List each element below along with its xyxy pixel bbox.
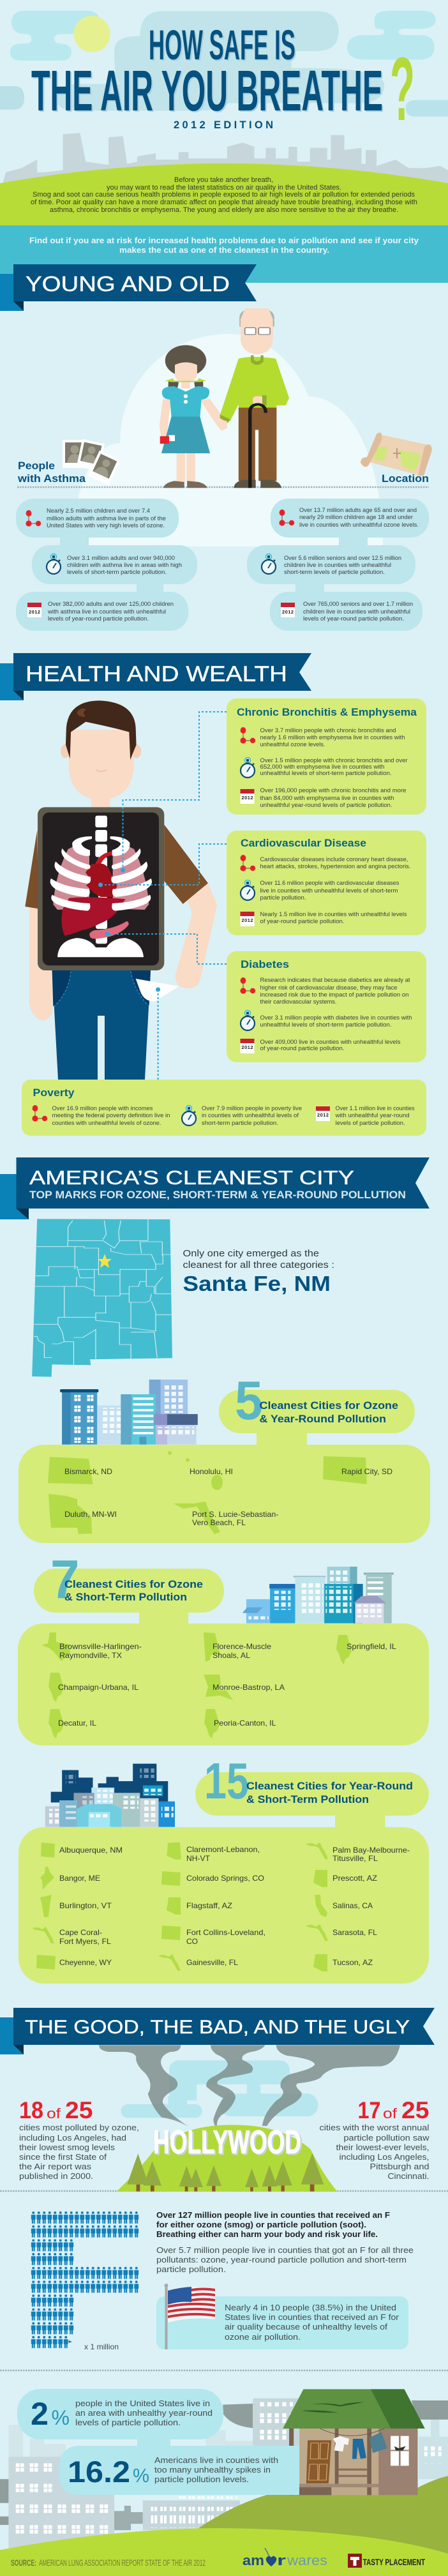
callout: 38.5 percent with flag: States live in counties that received an F for xyxy=(225,2312,399,2322)
stat: 17 of 25: cities with the worst annual xyxy=(319,2123,429,2132)
callout: 2 percent: people in the United States live in xyxy=(75,2399,210,2408)
heading: year-round and short-term xyxy=(246,1781,413,1805)
stat: 18 of 25: cities most polluted by ozone, xyxy=(19,2123,139,2132)
callout: 16.2 percent: too many unhealthy spikes in xyxy=(154,2465,271,2474)
callout: 2 percent: 2 xyxy=(31,2396,49,2432)
title: HOW SAFE IS xyxy=(150,22,297,70)
title: HOW SAFE IS xyxy=(149,21,295,68)
stat: 17 of 25: Pittsburgh and xyxy=(370,2162,429,2171)
panel: cardiovascular disease: Cardiovascular Disease xyxy=(241,837,366,849)
city names: Decatur, IL xyxy=(58,1719,97,1728)
icon: ozone molecule xyxy=(279,509,294,526)
panel: chronic bronchitis and emphysema: Chronic Bronchitis & Emphysema xyxy=(237,706,417,718)
header clouds and sun xyxy=(0,11,448,117)
section banner: america's cleanest city: TOP MARKS FOR OZONE, SHORT-TERM & YEAR-ROUND POLLUTION xyxy=(29,1189,406,1201)
panel: people with asthma stats: United States with very high levels of ozone. xyxy=(47,522,165,529)
panel: chronic bronchitis and emphysema: nearly 1.6 million with emphysema live in counties with xyxy=(260,734,405,741)
icon: American flag xyxy=(165,2284,215,2349)
callout: 16.2 percent: 16.2 xyxy=(68,2455,130,2489)
city names: Flagstaff, AZ xyxy=(186,1902,232,1910)
dotted divider xyxy=(0,2190,448,2192)
city names: Claremont-Lebanon, xyxy=(186,1846,260,1854)
green hill with intro: Before you take another breath, xyxy=(174,176,273,184)
panel: chronic bronchitis and emphysema: unhealthful ozone levels. xyxy=(260,741,325,748)
panel: people with asthma stats: with asthma live in counties with unhealthful xyxy=(47,608,166,615)
stat: 17 of 25: their lowest-ever levels, xyxy=(336,2143,429,2152)
panel: people with asthma stats: Nearly 2.5 million children and over 7.4 xyxy=(47,507,150,514)
panel: people with asthma stats: 2012 xyxy=(29,609,40,615)
panel: cardiovascular disease: live in counties with unhealthful levels of short-term xyxy=(260,887,398,894)
map: New Mexico counties with star at Santa Fe xyxy=(32,1219,172,1377)
city names xyxy=(64,1468,392,1527)
icon: ozone molecule xyxy=(240,855,255,871)
panel: diabetes: Over 409,000 live in counties with unhealthful levels xyxy=(260,1038,401,1045)
panel: cardiovascular disease: of year-round particle pollution. xyxy=(260,917,345,924)
stat: 18 of 25: the Air report was xyxy=(19,2162,91,2171)
panel: location stats: levels of year-round particle pollution. xyxy=(303,615,404,622)
logo: amorwares xyxy=(243,2548,327,2568)
girl xyxy=(160,345,227,488)
heading: people with asthma: with Asthma xyxy=(17,473,86,485)
panel: chronic bronchitis and emphysema: than 84,000 with emphysema live in counties with xyxy=(260,794,394,801)
panel: diabetes: 2012 xyxy=(241,1044,253,1050)
heading: people with asthma xyxy=(17,460,86,485)
illustration: city buildings xyxy=(243,1567,394,1623)
text: F grade counties: particle pollution. xyxy=(156,2264,226,2274)
panel: chronic bronchitis and emphysema: Over 1.5 million people with chronic bronchitis and over xyxy=(260,757,407,764)
connector lines: organs to panels xyxy=(101,712,227,1080)
panel: diabetes: their cardiovascular systems. xyxy=(260,998,337,1005)
source line xyxy=(11,2557,205,2568)
illustration: smog plumes xyxy=(99,2045,400,2129)
stat: 18 of 25: including Los Angeles, had xyxy=(19,2133,126,2143)
panel: 7 cleanest cities xyxy=(18,1549,429,1745)
panel: diabetes: Research indicates that because diabetics are already at xyxy=(260,976,410,983)
city names: Honolulu, HI xyxy=(190,1468,233,1476)
panel: poverty: with unhealthful year-round xyxy=(335,1111,410,1119)
heading: ozone and year-round xyxy=(259,1400,398,1425)
panel: cardiovascular disease: Cardiovascular diseases include coronary heart disease, xyxy=(260,855,408,862)
logo: amorwares: wares xyxy=(287,2552,327,2568)
panel: chronic bronchitis and emphysema xyxy=(227,698,426,815)
panel: people with asthma stats: Over 3.1 million adults and over 940,000 xyxy=(67,554,175,561)
heading: people with asthma: People xyxy=(18,460,55,472)
callout: 2 percent: an area with unhealthy year-round xyxy=(75,2408,213,2418)
panel: diabetes: higher risk of cardiovascular disease, they may face xyxy=(260,984,397,991)
text: F grade counties xyxy=(156,2210,414,2274)
panel: location stats: Over 5.6 million seniors and over 12.5 million xyxy=(284,554,401,561)
big number 7: 7 xyxy=(50,1549,79,1610)
panel: chronic bronchitis and emphysema: 652,000 with emphysema live in counties with xyxy=(260,763,384,770)
panel: cardiovascular disease: Over 11.6 million people with cardiovascular diseases xyxy=(260,879,399,886)
panel: poverty: 2012 xyxy=(317,1112,329,1118)
illustration: man with x-ray torso xyxy=(25,700,217,1080)
icon: location map xyxy=(361,433,432,476)
city names: Springfield, IL xyxy=(347,1643,397,1651)
icon: calendar xyxy=(240,789,254,804)
illustration: hills and run-down house xyxy=(0,2389,448,2576)
stat: 17 of 25: Cincinnati. xyxy=(388,2171,429,2181)
callout: 38.5 percent with flag: ozone air pollution. xyxy=(225,2332,301,2342)
panel: people with asthma stats xyxy=(16,499,197,631)
stat: 17 of 25: of xyxy=(383,2105,398,2121)
callout: 38.5 percent with flag xyxy=(156,2284,408,2349)
callout: 38.5 percent with flag: air quality because of unhealthy levels of xyxy=(225,2322,387,2331)
green hill with intro: of time. Poor air quality can have a more dramatic affect on people that already have trouble breathing, including those with xyxy=(31,199,417,206)
dotted divider xyxy=(0,2370,448,2371)
callout: 16.2 percent xyxy=(59,2446,299,2495)
section banner: young and old xyxy=(0,264,257,311)
panel: poverty: Over 7.9 million people in poverty live xyxy=(202,1104,302,1111)
subtitle: edition: 2012 EDITION xyxy=(174,119,273,131)
hollywood sign: HOLLYWOOD xyxy=(154,2125,302,2162)
city names: Peoria-Canton, IL xyxy=(214,1719,276,1728)
city names: Port S. Lucie-Sebastian- xyxy=(192,1510,279,1519)
city names: Bangor, ME xyxy=(59,1874,100,1883)
icon: stopwatch xyxy=(47,554,61,574)
logo: amorwares: am xyxy=(243,2552,264,2568)
skyline xyxy=(0,133,448,192)
pale cloud behind figures xyxy=(71,334,383,546)
panel: people with asthma stats: levels of short-term particle pollution. xyxy=(67,568,167,575)
text: only one city emerged: Santa Fe, NM xyxy=(183,1272,331,1295)
teal call-to-action band: makes the cut as one of the cleanest in the country. xyxy=(119,245,329,255)
city names: Colorado Springs, CO xyxy=(186,1874,264,1883)
city names: Fort Myers, FL xyxy=(59,1938,112,1946)
city names: CO xyxy=(186,1938,198,1946)
heading: ozone and year-round: & Year-Round Pollution xyxy=(259,1413,386,1425)
hollywood sign: HOLLYWOOD xyxy=(153,2124,301,2161)
callout: 2 percent: % xyxy=(51,2406,70,2429)
heading: location: Location xyxy=(382,473,429,485)
panel: people with asthma stats: children with asthma live in areas with high xyxy=(67,561,182,568)
heading: ozone and year-round: Cleanest Cities for Ozone xyxy=(259,1400,398,1412)
text: F grade counties: for either ozone (smog) or particle pollution (soot). xyxy=(156,2220,366,2229)
heading: ozone and short-term xyxy=(64,1579,203,1603)
panel: poverty: counties with unhealthful levels of ozone. xyxy=(52,1119,161,1126)
panel: cardiovascular disease: Nearly 1.5 million live in counties with unhealthful levels xyxy=(260,910,407,917)
icon: ozone molecule xyxy=(32,1105,47,1122)
panel: location stats: short-term levels of particle pollution. xyxy=(284,568,385,575)
stat: 17 of 25: particle pollution saw xyxy=(343,2133,429,2143)
source line: SOURCE: xyxy=(11,2557,36,2568)
city names: Champaign-Urbana, IL xyxy=(58,1683,139,1692)
callout: 16.2 percent: Americans live in counties with xyxy=(154,2455,278,2465)
panel: cardiovascular disease: particle pollution. xyxy=(260,894,306,901)
stat: 17 of 25 xyxy=(319,2097,429,2181)
callout: 2 percent: levels of particle pollution. xyxy=(75,2418,181,2427)
state silhouettes xyxy=(48,1451,367,1534)
text: F grade counties: Over 127 million people live in counties that received an F xyxy=(156,2210,390,2220)
city names: Gainesville, FL xyxy=(186,1959,239,1967)
illustration: dense city buildings xyxy=(45,1764,175,1827)
grandfather xyxy=(218,308,289,488)
heading: ozone and short-term: & Short-Term Pollution xyxy=(64,1592,187,1603)
panel: cardiovascular disease: 2012 xyxy=(241,917,253,923)
city names: Titusville, FL xyxy=(332,1855,378,1863)
city names: Fort Collins-Loveland, xyxy=(186,1929,265,1937)
panel: people with asthma stats: million adults with asthma live in parts of the xyxy=(47,515,166,522)
source line: AMERICAN LUNG ASSOCIATION REPORT STATE OF THE AIR 2012 xyxy=(39,2557,205,2568)
panel: poverty: in counties with unhealthful levels of xyxy=(202,1111,299,1119)
panel: diabetes: Diabetes xyxy=(241,958,289,970)
city names: NH-VT xyxy=(186,1855,210,1863)
x-ray panel xyxy=(38,807,164,970)
text: ? xyxy=(390,38,415,139)
city names xyxy=(58,1643,397,1728)
panel: poverty: levels of particle pollution. xyxy=(336,1119,405,1126)
panel: diabetes: Over 3.1 million people with diabetes live in counties with xyxy=(260,1014,412,1021)
icon: stopwatch xyxy=(241,757,255,778)
text: F grade counties: Over 5.7 million people live in counties that got an F for all three xyxy=(156,2245,414,2255)
city names xyxy=(59,1846,410,1967)
icon: calendar xyxy=(240,1039,254,1053)
section banner: the good, the bad, and the ugly: THE GOOD, THE BAD, AND THE UGLY xyxy=(25,2017,410,2038)
state silhouettes xyxy=(41,1632,352,1738)
icon: stopwatch xyxy=(262,554,276,574)
logo: tasty placement: TASTY PLACEMENT xyxy=(363,2557,425,2567)
section banner: america's cleanest city: AMERICA’S CLEANEST CITY xyxy=(29,1166,354,1189)
city names: Vero Beach, FL xyxy=(192,1519,246,1527)
panel: cardiovascular disease xyxy=(227,831,426,935)
callout: 2 percent xyxy=(17,2389,223,2447)
callout: 16.2 percent: % xyxy=(133,2464,149,2487)
panel: location stats: Over 13.7 million adults age 65 and over and xyxy=(299,506,417,513)
callout: 16.2 percent: particle pollution levels. xyxy=(154,2474,249,2484)
icon: stopwatch xyxy=(241,880,255,900)
big number 15: 15 xyxy=(204,1752,249,1809)
teal call-to-action band xyxy=(0,225,448,283)
text: only one city emerged: Only one city emerged as the xyxy=(183,1249,319,1259)
city names: Rapid City, SD xyxy=(341,1468,392,1476)
panel: location stats: 2012 xyxy=(282,609,294,615)
light clouds behind smoke xyxy=(121,2060,318,2118)
teal call-to-action band: Find out if you are at risk for increased health problems due to air pollution and see if your city xyxy=(29,236,419,245)
green hill with intro xyxy=(0,163,448,225)
panel: chronic bronchitis and emphysema: Over 3.7 million people with chronic bronchitis and xyxy=(260,727,396,734)
stat: 18 of 25: 18 xyxy=(19,2097,43,2123)
panel: poverty: Poverty xyxy=(33,1087,75,1099)
big number 5: 5 xyxy=(235,1371,263,1431)
city names: Monroe-Bastrop, LA xyxy=(213,1683,285,1692)
panel: chronic bronchitis and emphysema: unhealthful levels of short-term particle pollution. xyxy=(260,769,392,776)
panel: people with asthma stats: Over 382,000 adults and over 125,000 children xyxy=(48,600,174,607)
panel: location stats: Over 765,000 seniors and over 1.7 million xyxy=(303,600,413,607)
city names: Bismarck, ND xyxy=(64,1468,112,1476)
panel: diabetes: increased risk due to the impact of particle pollution on xyxy=(260,991,408,998)
green hill with intro: Smog and soot can cause serious health problems in people exposed to air high levels of air pollution for extended periods xyxy=(33,191,415,199)
panel: poverty: meeting the federal poverty definition live in xyxy=(52,1111,170,1119)
head xyxy=(61,700,141,811)
stat: 18 of 25: since the first State of xyxy=(19,2152,107,2162)
panel: chronic bronchitis and emphysema: Over 196,000 people with chronic bronchitis and more xyxy=(260,787,406,794)
icon: calendar xyxy=(316,1106,330,1121)
panel: chronic bronchitis and emphysema: 2012 xyxy=(241,795,253,801)
arms, sleeves and trousers xyxy=(25,825,217,1080)
panel: diabetes xyxy=(227,951,426,1062)
connector dots xyxy=(98,868,160,992)
panel: location stats: children live in counties with unhealthful xyxy=(303,608,410,615)
dotted ground line xyxy=(17,486,429,488)
text: F grade counties: pollutants: ozone, year-round particle pollution and short-term xyxy=(156,2255,407,2264)
section banner: health and wealth: HEALTH AND WEALTH xyxy=(26,662,287,686)
hollywood sign xyxy=(153,2124,302,2162)
illustration: city buildings xyxy=(60,1380,198,1445)
city names: Sarasota, FL xyxy=(332,1929,378,1937)
panel: poverty: Over 16.9 million people with incomes xyxy=(52,1104,153,1111)
city names: Palm Bay-Melbourne- xyxy=(332,1846,410,1855)
house xyxy=(283,2389,425,2495)
panel: people with asthma stats: levels of year-round particle pollution. xyxy=(48,615,149,622)
icon: calendar xyxy=(27,603,41,617)
panel: 5 cleanest cities xyxy=(19,1371,430,1543)
icon: calendar xyxy=(240,912,254,926)
section banner: health and wealth xyxy=(0,653,311,700)
city names: Albuquerque, NM xyxy=(59,1846,123,1855)
panel: location stats xyxy=(247,499,429,631)
section banner: young and old: YOUNG AND OLD xyxy=(26,272,230,296)
green hill with intro: asthma, chronic bronchitis or emphysema. The young and elderly are also more sensitive to the air they breathe. xyxy=(50,206,398,214)
state silhouettes xyxy=(32,1842,328,1971)
panel: location stats: live in counties with unhealthful ozone levels. xyxy=(299,521,419,528)
icon: stopwatch xyxy=(182,1106,196,1126)
city names: Salinas, CA xyxy=(332,1902,373,1910)
panel: location stats: nearly 29 million children age 18 and under xyxy=(299,513,413,520)
panel: diabetes: unhealthful levels of short-term particle pollution. xyxy=(260,1021,392,1028)
stat: 17 of 25: 17 xyxy=(357,2097,380,2123)
trees xyxy=(127,2153,324,2192)
stat: 18 of 25: published in 2000. xyxy=(19,2171,93,2181)
city names: Prescott, AZ xyxy=(332,1874,377,1883)
city names: Cheyenne, WY xyxy=(59,1959,112,1967)
icon: yellow star on Santa Fe xyxy=(98,1254,112,1268)
illustration: girl and grandfather xyxy=(160,308,289,488)
panel: 15 cleanest cities xyxy=(19,1752,429,1984)
panel: chronic bronchitis and emphysema: unhealthful year-round levels of particle pollution. xyxy=(260,801,392,808)
logo: tasty placement xyxy=(348,2554,425,2568)
illustration: polluted city background xyxy=(0,2399,448,2552)
stat: 17 of 25: 25 xyxy=(401,2097,429,2123)
panel: poverty: Over 1.1 million live in counties xyxy=(336,1104,415,1111)
text: only one city emerged: cleanest for all three categories : xyxy=(183,1260,334,1270)
stat: 18 of 25: 25 xyxy=(65,2097,93,2123)
icon: ozone molecule xyxy=(240,727,255,744)
panel: poverty xyxy=(22,1080,426,1136)
pictogram: letter F made of 127 people xyxy=(31,2211,139,2349)
city names: Cape Coral- xyxy=(59,1929,102,1937)
city names: Raymondville, TX xyxy=(59,1652,122,1660)
title xyxy=(31,21,415,139)
green hill with intro: you may want to read the latest statistics on air quality in the United States. xyxy=(107,184,341,192)
city names: Shoals, AL xyxy=(213,1652,251,1660)
icon: asthma photos xyxy=(63,439,121,486)
heading: year-round and short-term: & Short-Term Pollution xyxy=(246,1794,369,1805)
heading: ozone and short-term: Cleanest Cities for Ozone xyxy=(64,1579,203,1590)
city names: Florence-Muscle xyxy=(213,1643,271,1651)
panel: poverty: short-term particle pollution. xyxy=(202,1119,278,1126)
section banner: the good, the bad, and the ugly xyxy=(0,2008,435,2054)
panel: cardiovascular disease: heart attacks, strokes, hypertension and angina pectoris. xyxy=(260,862,411,870)
logo: amorwares: r xyxy=(277,2552,287,2568)
city names: Burlington, VT xyxy=(59,1902,112,1910)
stat: 18 of 25: their lowest smog levels xyxy=(19,2143,115,2152)
illustration: Hollywood hill with trees xyxy=(117,2124,337,2192)
stat: 17 of 25: including Los Angeles, xyxy=(340,2152,429,2162)
legend: x 1 million: x 1 million xyxy=(84,2342,119,2351)
panel: diabetes: of year-round particle pollution. xyxy=(260,1044,345,1051)
city names: Tucson, AZ xyxy=(332,1959,373,1967)
icon: calendar xyxy=(281,603,295,617)
icon: ozone molecule xyxy=(26,510,41,527)
icon: stopwatch xyxy=(241,1010,255,1030)
text: only one city emerged xyxy=(183,1249,334,1295)
city names: Duluth, MN-WI xyxy=(64,1510,117,1519)
city names: Brownsville-Harlingen- xyxy=(59,1643,142,1651)
callout: 38.5 percent with flag: Nearly 4 in 10 people (38.5%) in the United xyxy=(225,2303,396,2312)
heading: year-round and short-term: Cleanest Cities for Year-Round xyxy=(246,1781,413,1792)
icon: ozone molecule xyxy=(240,977,255,994)
panel: location stats: children live in counties with unhealthful xyxy=(284,561,391,568)
text: F grade counties: Breathing either can harm your body and risk your life. xyxy=(156,2229,378,2239)
stat: 18 of 25: of xyxy=(47,2105,61,2121)
stat: 18 of 25 xyxy=(19,2097,139,2181)
section banner: america's cleanest city xyxy=(0,1157,429,1219)
